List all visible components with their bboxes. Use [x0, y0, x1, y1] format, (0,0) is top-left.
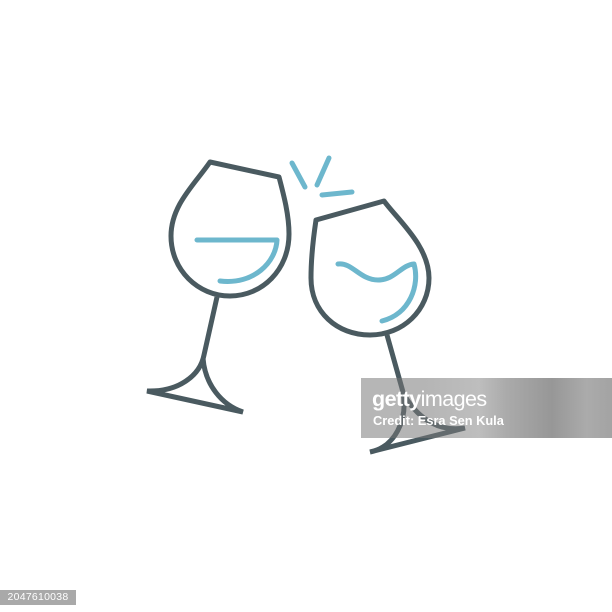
- clink spark lines: [292, 158, 352, 195]
- left glass stem and foot: [147, 297, 243, 412]
- right glass bowl: [311, 201, 429, 335]
- image id tag: 2047610038: [8, 591, 68, 603]
- watermark credit: Credit: Esra Sen Kula: [373, 413, 504, 428]
- right glass stem and foot: [370, 335, 465, 452]
- right wine glass: [311, 201, 465, 452]
- left glass wine: [197, 240, 277, 281]
- watermark logo: gettyimages: [372, 387, 487, 411]
- watermark banner: [361, 378, 612, 438]
- image id tag: [0, 590, 76, 605]
- left wine glass: [147, 162, 289, 412]
- right glass wine: [338, 264, 416, 321]
- left glass bowl: [171, 162, 289, 296]
